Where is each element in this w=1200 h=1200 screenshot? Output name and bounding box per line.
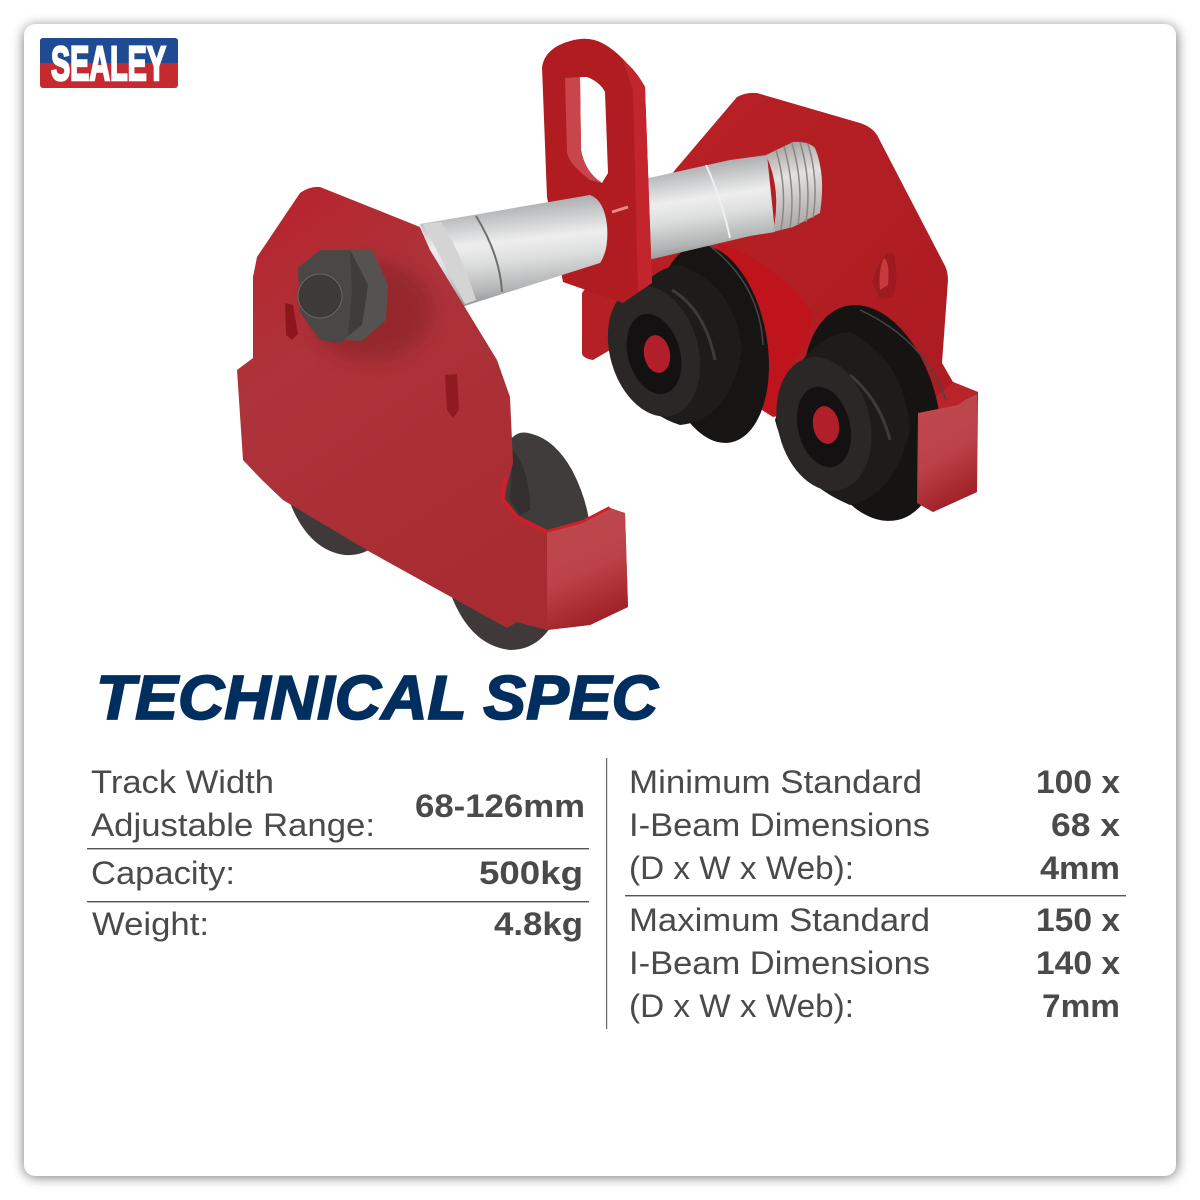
spec table: right column: Minimum Standard bbox=[629, 764, 922, 800]
wheel 2 bbox=[763, 290, 963, 536]
column divider bbox=[606, 758, 607, 1029]
spec table: left column: 68-126mm bbox=[415, 788, 585, 824]
spec table: right column: 4mm bbox=[1040, 850, 1120, 886]
lifting eye lug bbox=[542, 39, 652, 303]
front side plate bbox=[237, 187, 628, 630]
spec table: right column: 150 x bbox=[1036, 902, 1120, 938]
spec table: right column: 140 x bbox=[1036, 945, 1120, 981]
back plate lip bbox=[918, 382, 978, 413]
front plate lip bbox=[547, 509, 628, 630]
spec table: right column: 100 x bbox=[1036, 764, 1120, 800]
wheels under the front plate bbox=[286, 433, 589, 650]
bolt shadow bbox=[308, 260, 432, 360]
spec table: right column: 68 x bbox=[1051, 807, 1120, 843]
bright spacer between wheels bbox=[718, 243, 813, 417]
spec table: left column: 4.8kg bbox=[494, 906, 583, 942]
spec table: right column: (D x W x Web): bbox=[629, 988, 854, 1024]
stud bbox=[872, 253, 896, 299]
spec table: right column: Maximum Standard bbox=[629, 902, 930, 938]
logo: Sealey bbox=[40, 38, 178, 91]
spec table: left column: 500kg bbox=[479, 855, 583, 891]
product photo: beam trolley bbox=[237, 39, 978, 650]
shaft right section bbox=[640, 142, 822, 262]
spec table: left column bbox=[87, 764, 589, 942]
slot cut-outs bbox=[285, 303, 298, 340]
hex nut and bolt bbox=[298, 249, 388, 343]
spec table: left column: Adjustable Range: bbox=[91, 807, 375, 843]
spec table: right column: I-Beam Dimensions bbox=[629, 807, 930, 843]
spec table: right column: 7mm bbox=[1042, 988, 1120, 1024]
spec table: right column bbox=[625, 764, 1126, 1024]
shaft left section bbox=[420, 195, 628, 310]
title: TECHNICAL SPEC bbox=[96, 664, 659, 733]
spec table: left column: Track Width bbox=[91, 764, 274, 800]
spec table: right column: (D x W x Web): bbox=[629, 850, 854, 886]
logo: Sealey: SEALEY bbox=[51, 38, 166, 91]
spec table: left column: Capacity: bbox=[91, 855, 235, 891]
spec table: right column: I-Beam Dimensions bbox=[629, 945, 930, 981]
front plate edge highlight bbox=[503, 478, 610, 532]
back side plate bbox=[582, 93, 978, 512]
wheel 1 bbox=[593, 236, 784, 452]
spec table: left column: Weight: bbox=[92, 906, 209, 942]
back lip front bbox=[917, 394, 977, 512]
